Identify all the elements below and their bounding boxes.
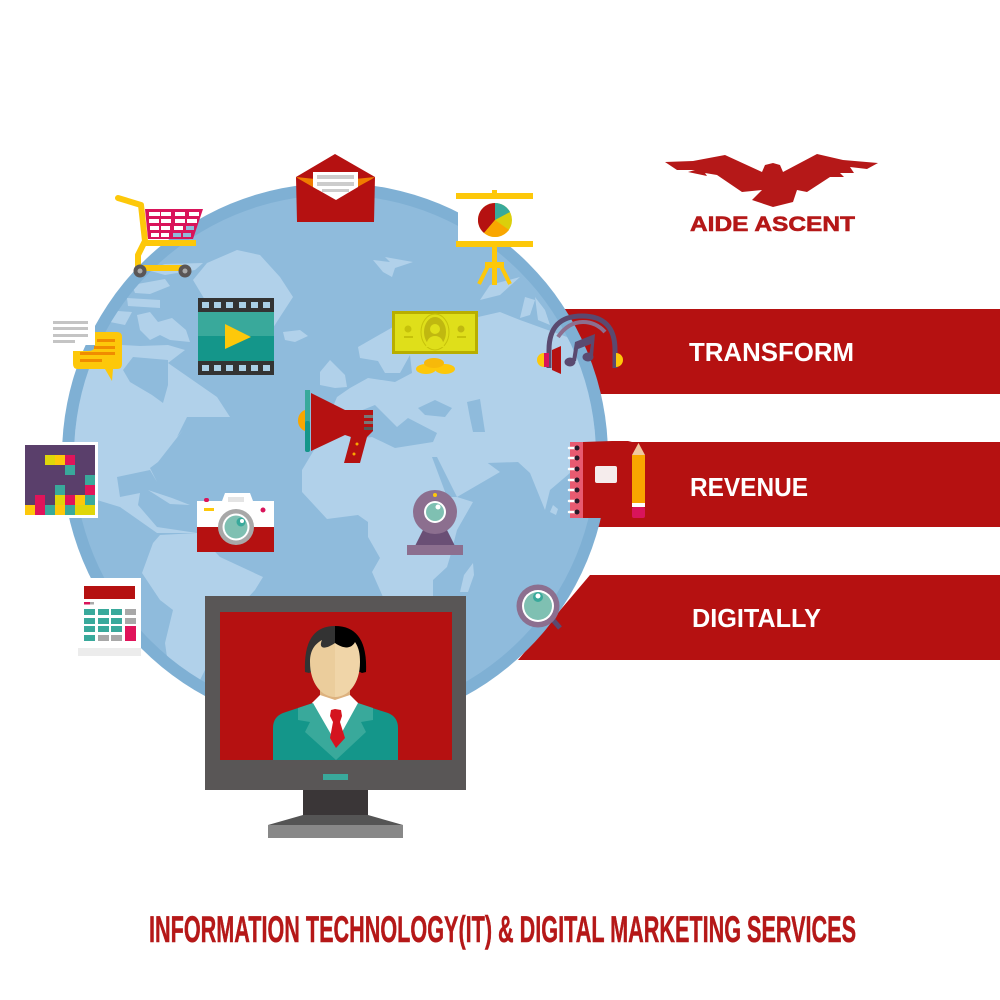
- logo eagle: [665, 154, 878, 207]
- monitor frame: [205, 596, 466, 790]
- logo: aide ascent: [665, 154, 878, 236]
- banner: transform: TRANSFORM: [689, 337, 854, 367]
- globe with world map: [62, 186, 608, 696]
- infographic canvas: [25, 154, 1000, 950]
- icon: envelope: [296, 154, 375, 222]
- icon: shopping cart: [118, 198, 203, 278]
- monitor stand: [268, 790, 403, 838]
- icon: megaphone: [298, 390, 373, 463]
- banner: transform: [500, 309, 1000, 394]
- icon: banknote and coins: [392, 311, 478, 374]
- banner: revenue: [500, 442, 1000, 527]
- banner: digitally: DIGITALLY: [692, 603, 821, 633]
- monitor button: [323, 774, 348, 780]
- person avatar: [273, 626, 398, 760]
- icon: camera: [197, 493, 274, 552]
- monitor screen: [220, 612, 452, 760]
- computer monitor with person: [205, 596, 466, 838]
- icon: magnifying glass: [516, 584, 560, 628]
- banner: revenue: REVENUE: [690, 472, 808, 502]
- banner: digitally: [518, 575, 1000, 660]
- logo wordmark: AIDE ASCENT: [690, 213, 855, 236]
- icon: chat bubbles: [50, 315, 122, 381]
- icon: webcam: [407, 490, 463, 555]
- icon: headphones and music note: [537, 316, 623, 374]
- icon: video player: [198, 298, 274, 375]
- icon: calculator: [78, 578, 141, 656]
- icon: presentation easel with pie chart: [456, 190, 533, 285]
- icon: notebook and pencil: [569, 441, 645, 518]
- icon: tetris game screen: [22, 442, 98, 518]
